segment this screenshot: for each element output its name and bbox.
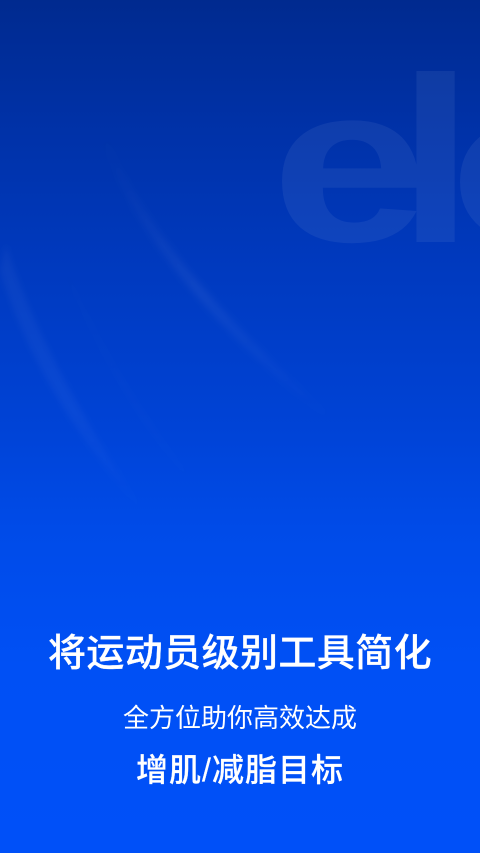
- light streak: upper arc: [100, 125, 350, 435]
- watermark logo text: l: [397, 28, 474, 292]
- light streak: thin arc: [50, 235, 198, 488]
- title: 将运动员级别工具简化: [48, 633, 432, 675]
- subtitle: 全方位助你高效达成: [123, 703, 357, 733]
- watermark logo text: e: [271, 39, 429, 289]
- light streak: left wide arc: [0, 245, 150, 520]
- goal line: 增肌/减脂目标: [136, 752, 344, 788]
